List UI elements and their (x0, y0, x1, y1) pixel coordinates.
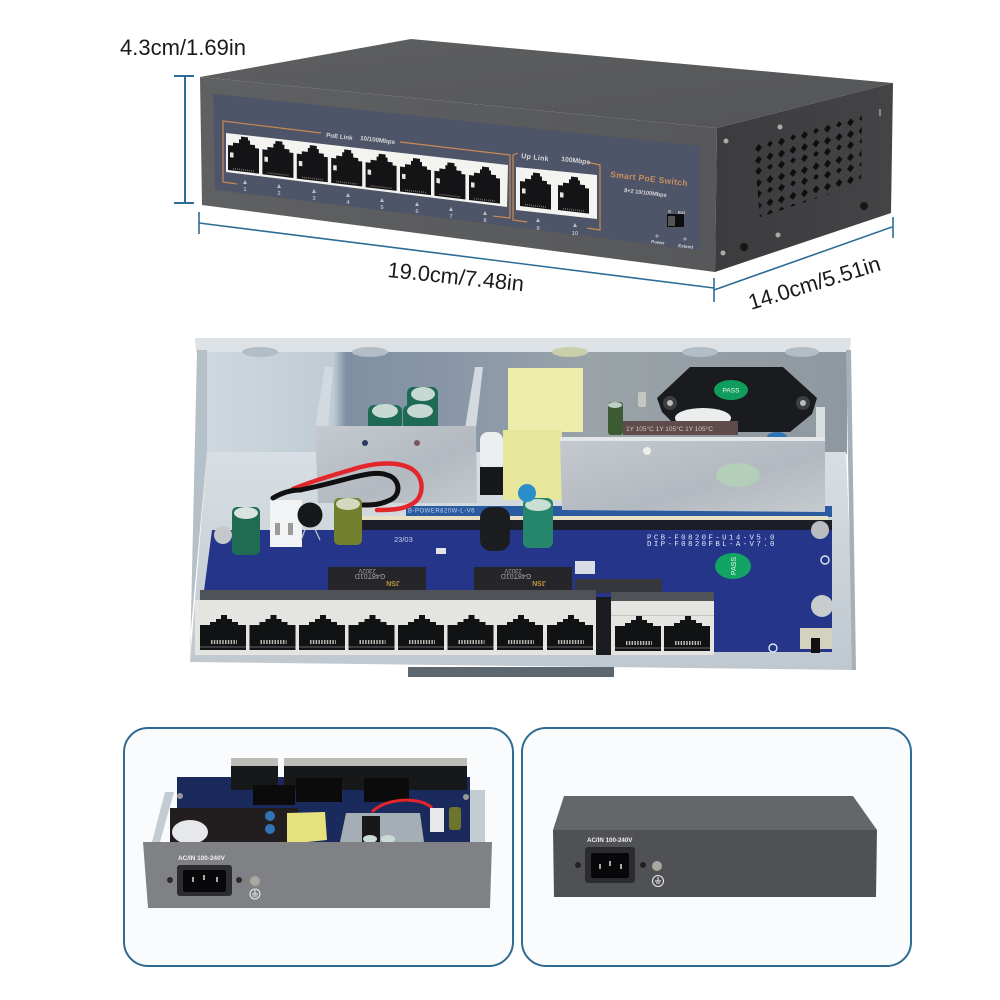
dimension label: width: 19.0cm/7.48in (386, 257, 525, 296)
panel text: 8+2 10/100Mbps (624, 188, 667, 199)
port numbers: 2 (277, 191, 281, 197)
panel text: S (668, 209, 671, 214)
chips: G48T01D (501, 572, 531, 579)
chips: 2302V (504, 567, 522, 573)
RJ45 housing (195, 590, 714, 655)
opened switch photo (190, 338, 856, 677)
port numbers: 10 (572, 231, 578, 237)
screws and ground (575, 861, 664, 886)
screws and ground (167, 876, 260, 899)
heat sink (340, 813, 424, 843)
PCB and connectors (152, 758, 485, 842)
panel text: Up Link (521, 153, 549, 163)
right heat sink (560, 407, 825, 512)
side face with vent (715, 83, 893, 272)
chips (328, 567, 662, 593)
port numbers: 6 (415, 209, 419, 215)
power board strip: B-POWER820W-L-V6 (408, 508, 475, 514)
red and black wires (273, 463, 422, 510)
panel text: Extend (678, 243, 694, 250)
panel text (326, 132, 694, 250)
yellow transformer (480, 368, 583, 500)
capacitors behind left heat sink (368, 387, 438, 430)
chips: JSN (386, 579, 400, 586)
panel text: Ext (678, 210, 686, 215)
panel text: 10/100Mbps (360, 135, 396, 146)
wire (372, 800, 432, 812)
port numbers: 8 (483, 218, 487, 224)
AC socket rear: PASS (723, 388, 740, 394)
panel text: Power (651, 239, 665, 246)
panel: closed rear view (522, 728, 911, 966)
blue PCB: 23/03 (394, 535, 413, 544)
port numbers: 4 (346, 200, 350, 206)
power board strip (355, 506, 832, 530)
dimension label: height: 4.3cm/1.69in (120, 35, 246, 60)
blue PCB: DIP-F0820FBL-A-V7.0 (647, 541, 777, 549)
transformer (287, 812, 327, 844)
panel text: Smart PoE Switch (610, 169, 688, 188)
mode switch (667, 214, 684, 227)
blue PCB: PASS (731, 557, 738, 575)
connector and capacitor (430, 807, 461, 832)
port numbers (243, 180, 578, 237)
electrolytic capacitor (608, 392, 646, 435)
port numbers: 3 (312, 196, 316, 202)
chips: 2302V (358, 567, 376, 573)
front face (200, 77, 717, 272)
chips: G48T01D (355, 572, 385, 579)
metal tray (190, 338, 856, 670)
port numbers: 7 (449, 214, 453, 220)
socket rear and capacitor (170, 808, 298, 844)
LEDs (655, 234, 687, 241)
slide switch (800, 628, 832, 653)
panel text: 100Mbps (561, 156, 591, 166)
label: AC/IN 100-240V (178, 855, 226, 862)
label: AC/IN 100-240V (587, 837, 633, 844)
switch product photo: closed unit (200, 39, 893, 272)
wire connector (270, 500, 302, 547)
port numbers: 9 (536, 226, 540, 232)
panel text: PoE Link (326, 132, 353, 142)
AC socket rear (657, 367, 817, 432)
AC inlet (585, 847, 635, 883)
rear plate (143, 842, 492, 908)
faceplate label panel (215, 96, 698, 248)
dimension label: depth: 14.0cm/5.51in (745, 251, 883, 315)
AC inlet (177, 865, 232, 896)
port numbers: 5 (380, 205, 384, 211)
rear face (553, 830, 877, 897)
top face (200, 39, 893, 128)
film capacitors (623, 408, 787, 442)
dimension bracket: height (174, 76, 194, 203)
port numbers: 1 (243, 187, 247, 193)
blue PCB: PCB-F0820F-U14-V5.0 (647, 534, 777, 542)
blue PCB (196, 521, 833, 652)
dimension line: width (199, 212, 714, 302)
chips: JSN (532, 579, 546, 586)
PoE port group (226, 133, 508, 207)
left heat sink (315, 367, 483, 503)
tray bottom lip (408, 667, 614, 677)
film capacitors: 1Y 105°C 1Y 105°C 1Y 105°C (626, 425, 713, 433)
uplink port group (516, 167, 597, 219)
orange brackets (223, 121, 600, 230)
components on PCB (232, 484, 553, 555)
panel: opened rear view (124, 728, 513, 966)
dimension line: depth (714, 217, 893, 290)
top face (553, 796, 877, 830)
